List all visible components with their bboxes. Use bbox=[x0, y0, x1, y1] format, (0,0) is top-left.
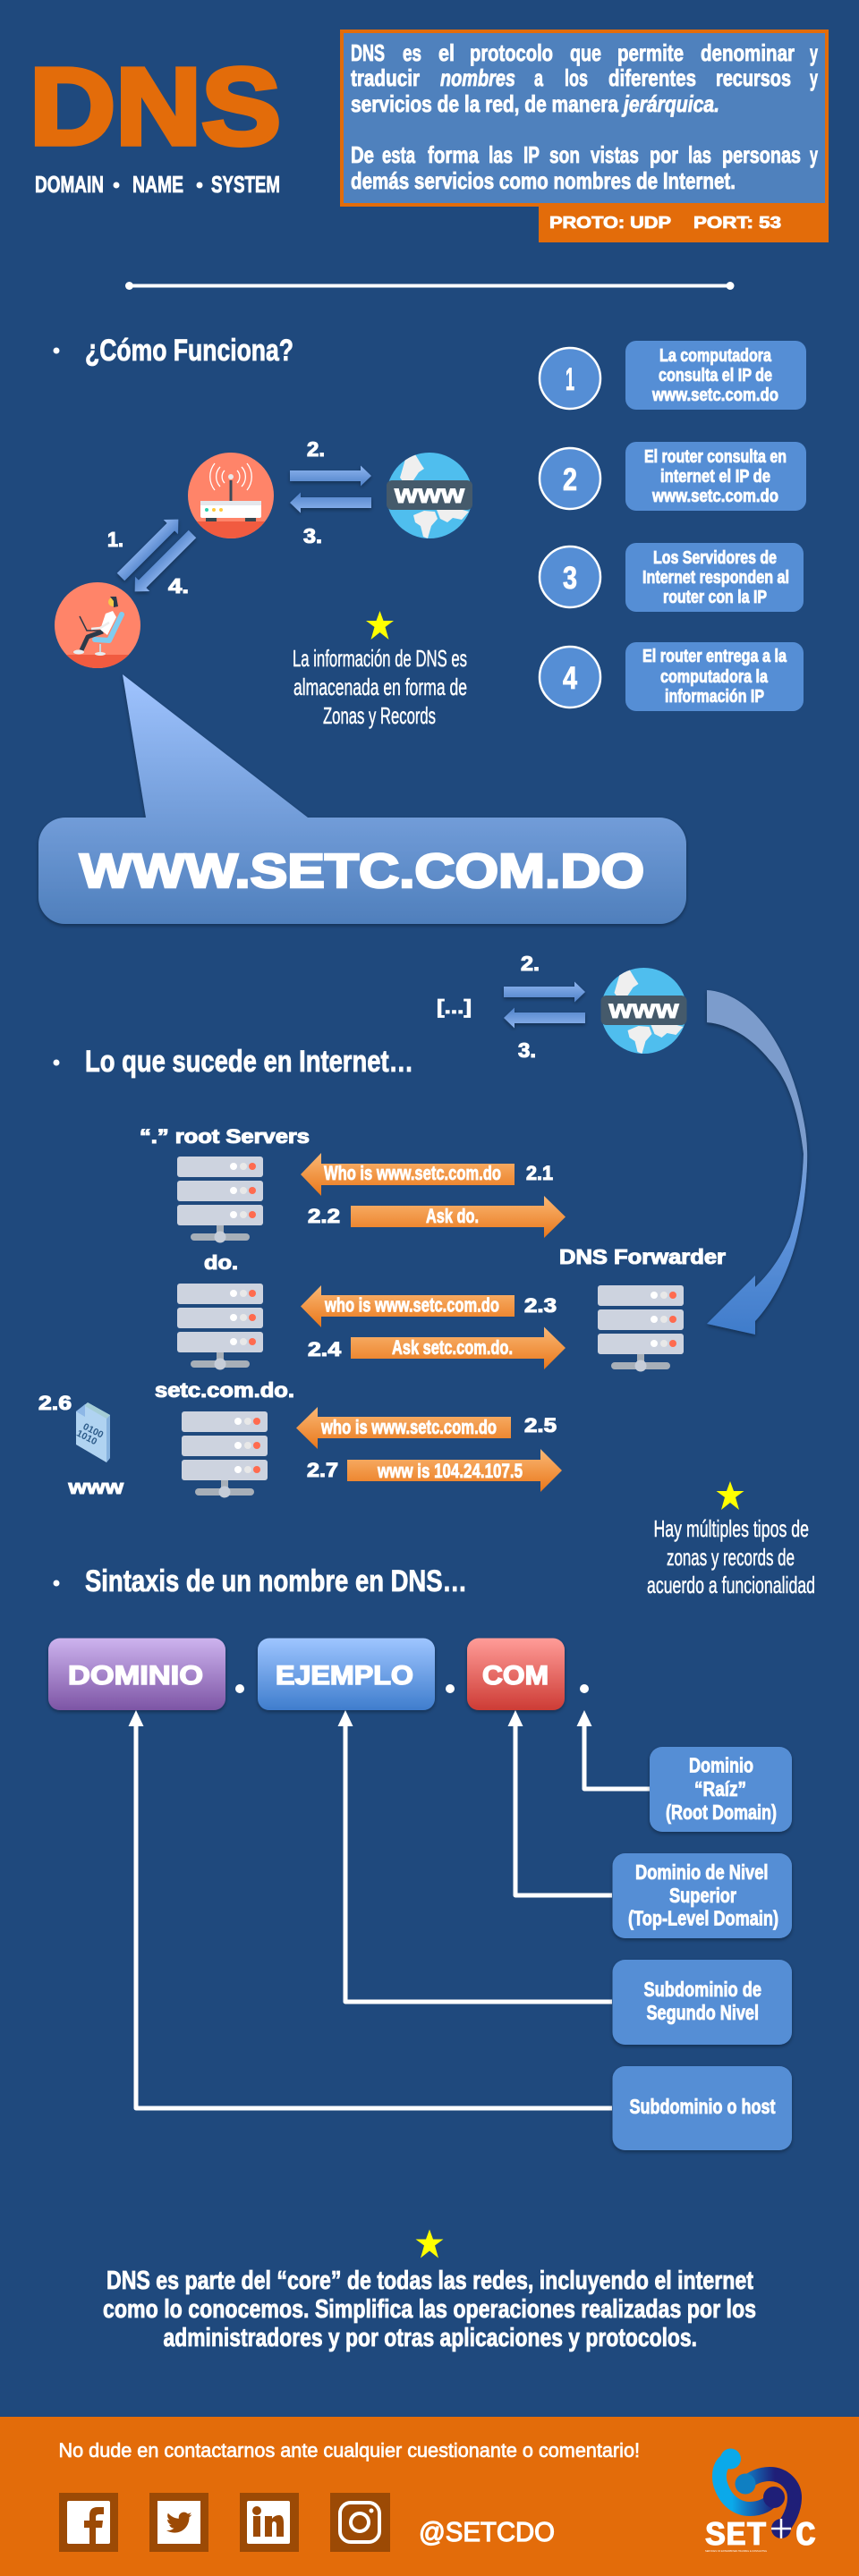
step 3: 3 bbox=[563, 561, 577, 596]
callout: www.setc.com.do: WWW.SETC.COM.DO bbox=[80, 844, 644, 898]
arrow: 2.2 root answer: Ask do. bbox=[426, 1205, 479, 1227]
icon: www globe upper bbox=[601, 968, 687, 1054]
text block: zone types note bbox=[647, 1515, 815, 1598]
label: dominio: DOMINIO bbox=[68, 1661, 203, 1690]
step 4: El router entrega a la bbox=[642, 647, 787, 666]
panel: DNS definition: protocolo bbox=[470, 39, 553, 66]
label: ejemplo: EJEMPLO bbox=[276, 1661, 413, 1690]
panel: DNS definition: vistas bbox=[591, 141, 639, 168]
server: do.: do. bbox=[204, 1251, 238, 1274]
arrow: 2.1 query root bbox=[301, 1153, 553, 1196]
text block: closing statement: administradores y por otras aplicaciones y protocolos. bbox=[163, 2324, 697, 2352]
panel: DNS definition: el bbox=[438, 39, 455, 66]
arrow: 2.5 query setc: who is www.setc.com.do bbox=[320, 1416, 497, 1438]
panel: protocol and port bbox=[539, 207, 829, 242]
arrow: 2.1 query root: Who is www.setc.com.do bbox=[324, 1162, 501, 1184]
icon: star note three bbox=[415, 2229, 444, 2258]
icon: www zone file: 1010 bbox=[74, 1428, 98, 1447]
step labels on diagram: 3. bbox=[303, 524, 322, 547]
panel: DNS definition: son bbox=[549, 141, 580, 168]
arrow: second level to ejemplo bbox=[338, 1710, 612, 2002]
text block: zone types note: zonas y records de bbox=[667, 1544, 795, 1571]
arrow: 2.7 answer: www is 104.24.107.5 bbox=[377, 1460, 523, 1482]
icon: www zone file bbox=[38, 1392, 124, 1498]
server: root servers bbox=[140, 1125, 310, 1243]
arrow: 2.2 root answer bbox=[308, 1196, 566, 1238]
box: top-level domain: Dominio de Nivel bbox=[635, 1860, 768, 1884]
arrow: step 2 bbox=[290, 465, 371, 487]
server: root servers: “.” root Servers bbox=[140, 1125, 310, 1148]
arrow: top level to com bbox=[508, 1710, 612, 1895]
text block: DNS information note bbox=[293, 645, 467, 729]
subtitle: domain name system: SYSTEM bbox=[211, 171, 280, 198]
heading: como funciona bbox=[54, 334, 293, 368]
icon: star note bbox=[366, 611, 394, 640]
arrow: 2.2 root answer: 2.2 bbox=[308, 1205, 340, 1227]
step 3: router con la IP bbox=[663, 588, 767, 607]
step labels on diagram: 1. bbox=[107, 528, 123, 551]
panel: DNS definition: las bbox=[688, 141, 711, 168]
label: com: COM bbox=[482, 1661, 549, 1690]
panel: DNS definition: esta bbox=[382, 141, 415, 168]
label: ejemplo bbox=[258, 1639, 435, 1710]
logo: SET+C: SERVICES OF ENTERPRISES TRAINING & CONSULTING bbox=[705, 2550, 767, 2553]
step 1: www.setc.com.do bbox=[651, 386, 778, 405]
subtitle: domain name system: DOMAIN bbox=[35, 171, 104, 198]
server: DNS forwarder bbox=[559, 1245, 726, 1372]
panel: DNS definition: jerárquica. bbox=[622, 90, 719, 117]
callout: www.setc.com.do bbox=[38, 674, 686, 924]
box: root domain bbox=[650, 1747, 792, 1832]
icon: twitter bbox=[149, 2493, 208, 2552]
step 2: El router consulta en bbox=[644, 447, 787, 467]
arrow: root to dot bbox=[576, 1710, 650, 1789]
step 2 bbox=[540, 442, 806, 511]
panel: DNS definition: permite bbox=[617, 39, 684, 66]
icon: www globe upper: www bbox=[608, 995, 679, 1024]
icon: www zone file: www bbox=[67, 1476, 124, 1498]
server: DNS forwarder: DNS Forwarder bbox=[559, 1245, 726, 1268]
step 1 bbox=[540, 341, 806, 410]
panel: DNS definition bbox=[342, 31, 827, 205]
step 3: Los Servidores de bbox=[653, 548, 777, 568]
step labels on diagram: 4. bbox=[168, 574, 189, 597]
arrow: from internet bbox=[504, 1007, 585, 1029]
box: subdomain or host bbox=[612, 2066, 792, 2150]
panel: DNS definition: las bbox=[489, 141, 513, 168]
server: setc.com.do. bbox=[155, 1378, 294, 1497]
arrow: 2.3 query do: 2.3 bbox=[524, 1294, 557, 1317]
panel: DNS definition: y bbox=[810, 39, 818, 66]
text block: DNS information note: almacenada en forma de bbox=[293, 674, 467, 700]
arrow: host to dominio bbox=[129, 1710, 612, 2108]
subtitle: domain name system bbox=[35, 171, 280, 198]
box: top-level domain: Superior bbox=[669, 1884, 736, 1907]
arrow: 2.3 query do: who is www.setc.com.do bbox=[324, 1293, 499, 1317]
arrow: step 1 bbox=[114, 513, 185, 584]
panel: DNS definition: nombres bbox=[440, 64, 515, 91]
arrow: 2.7 answer: 2.7 bbox=[307, 1459, 338, 1481]
box: subdomain or host: Subdominio o host bbox=[630, 2095, 776, 2118]
heading: como funciona: ¿Cómo Funciona? bbox=[85, 334, 293, 368]
panel: DNS definition: y bbox=[810, 64, 818, 91]
icon: router bbox=[188, 453, 274, 538]
title: DNS: DNS bbox=[30, 46, 281, 167]
panel: DNS definition: diferentes bbox=[608, 64, 696, 91]
label: dominio bbox=[48, 1639, 225, 1710]
step 2: internet el IP de bbox=[660, 467, 770, 487]
second diagram labels: [...] bbox=[437, 996, 472, 1018]
step 3: Internet responden al bbox=[642, 568, 789, 588]
arrow: curved to DNS forwarder bbox=[707, 990, 807, 1335]
step 3 bbox=[540, 543, 804, 612]
icon: facebook bbox=[59, 2493, 118, 2552]
heading: lo que sucede en internet: Lo que sucede en Internet… bbox=[85, 1045, 413, 1079]
logo: SET+C bbox=[705, 2449, 816, 2555]
step labels on diagram: 2. bbox=[307, 437, 325, 461]
heading: sintaxis: Sintaxis de un nombre en DNS… bbox=[85, 1564, 467, 1598]
panel: DNS definition: que bbox=[570, 39, 601, 66]
panel: DNS definition: recursos bbox=[716, 64, 791, 91]
panel: DNS definition: por bbox=[650, 141, 678, 168]
footer band bbox=[0, 2417, 859, 2576]
icon: www zone file: 0100 bbox=[81, 1421, 106, 1441]
panel: DNS definition: es bbox=[403, 39, 421, 66]
panel: DNS definition: IP bbox=[523, 141, 540, 168]
panel: DNS definition: demás servicios como nombres de Internet. bbox=[351, 167, 736, 194]
social handle: @SETCDO bbox=[419, 2516, 555, 2547]
arrow: step 3 bbox=[290, 492, 371, 513]
second diagram labels bbox=[437, 952, 540, 1062]
logo: SET+C: SET bbox=[705, 2517, 767, 2555]
panel: protocol and port: PORT: 53 bbox=[693, 214, 781, 232]
box: second level: Subdominio de bbox=[644, 1978, 761, 2001]
panel: DNS definition: De bbox=[351, 141, 374, 168]
box: root domain: (Root Domain) bbox=[666, 1801, 777, 1824]
panel: DNS definition: personas bbox=[722, 141, 801, 168]
server: setc.com.do.: setc.com.do. bbox=[155, 1378, 294, 1402]
step 4: información IP bbox=[665, 687, 764, 707]
footer contact text: No dude en contactarnos ante cualquier cuestionante o comentario! bbox=[59, 2439, 640, 2462]
panel: DNS definition: forma bbox=[428, 141, 479, 168]
label: com bbox=[467, 1639, 565, 1710]
arrow: to internet bbox=[504, 982, 585, 1002]
arrow: 2.7 answer bbox=[307, 1449, 562, 1492]
step 4: 4 bbox=[563, 661, 577, 696]
arrow: 2.4 do answer bbox=[308, 1327, 566, 1369]
step 1: 1 bbox=[566, 362, 574, 397]
panel: DNS definition: y bbox=[810, 141, 818, 168]
panel: DNS definition: traducir bbox=[351, 64, 420, 91]
second diagram labels: 2. bbox=[521, 952, 540, 975]
icon: www zone file: 2.6 bbox=[38, 1392, 72, 1414]
arrow: 2.1 query root: 2.1 bbox=[526, 1162, 553, 1184]
icon: instagram bbox=[330, 2493, 390, 2552]
box: second level: Segundo Nivel bbox=[646, 2001, 759, 2024]
server: do. bbox=[177, 1251, 263, 1370]
step labels on diagram bbox=[107, 437, 325, 597]
icon: www globe: www bbox=[394, 479, 465, 509]
icon: star note two bbox=[716, 1481, 744, 1510]
box: root domain: Dominio bbox=[689, 1753, 753, 1776]
arrow: 2.3 query do bbox=[301, 1285, 557, 1327]
arrow: 2.4 do answer: 2.4 bbox=[308, 1338, 342, 1360]
step 1: La computadora bbox=[659, 346, 772, 366]
text block: DNS information note: Zonas y Records bbox=[323, 702, 436, 729]
panel: DNS definition: los bbox=[565, 64, 588, 91]
step 4: computadora la bbox=[660, 667, 769, 687]
logo: SET+C: C bbox=[795, 2517, 816, 2555]
arrow: 2.4 do answer: Ask setc.com.do. bbox=[392, 1336, 513, 1359]
panel: protocol and port: PROTO: UDP bbox=[549, 214, 671, 232]
step 2: www.setc.com.do bbox=[651, 487, 778, 506]
icon: linkedin bbox=[240, 2493, 299, 2552]
icon: www globe bbox=[387, 453, 472, 538]
box: top-level domain: (Top-Level Domain) bbox=[628, 1907, 778, 1930]
box: root domain: “Raíz” bbox=[694, 1777, 746, 1801]
step 1: consulta el IP de bbox=[659, 366, 772, 386]
text block: closing statement bbox=[103, 2267, 756, 2352]
arrow: 2.5 query setc: 2.5 bbox=[524, 1414, 557, 1436]
panel: DNS definition: denominar bbox=[701, 39, 795, 66]
text block: DNS information note: La información de DNS es bbox=[293, 645, 467, 672]
box: second level bbox=[612, 1960, 792, 2045]
subtitle: domain name system: NAME bbox=[132, 171, 183, 198]
step 2: 2 bbox=[563, 462, 577, 497]
second diagram labels: 3. bbox=[518, 1038, 536, 1062]
panel: DNS definition: a bbox=[534, 64, 543, 91]
step 4 bbox=[540, 642, 804, 711]
arrow: step 4 bbox=[128, 527, 200, 598]
panel: DNS definition: servicios de la red, de manera bbox=[351, 90, 618, 117]
box: top-level domain bbox=[612, 1853, 792, 1938]
icon: person at laptop bbox=[55, 582, 140, 668]
arrow: 2.5 query setc bbox=[296, 1407, 557, 1449]
panel: DNS definition: DNS bbox=[351, 39, 385, 66]
